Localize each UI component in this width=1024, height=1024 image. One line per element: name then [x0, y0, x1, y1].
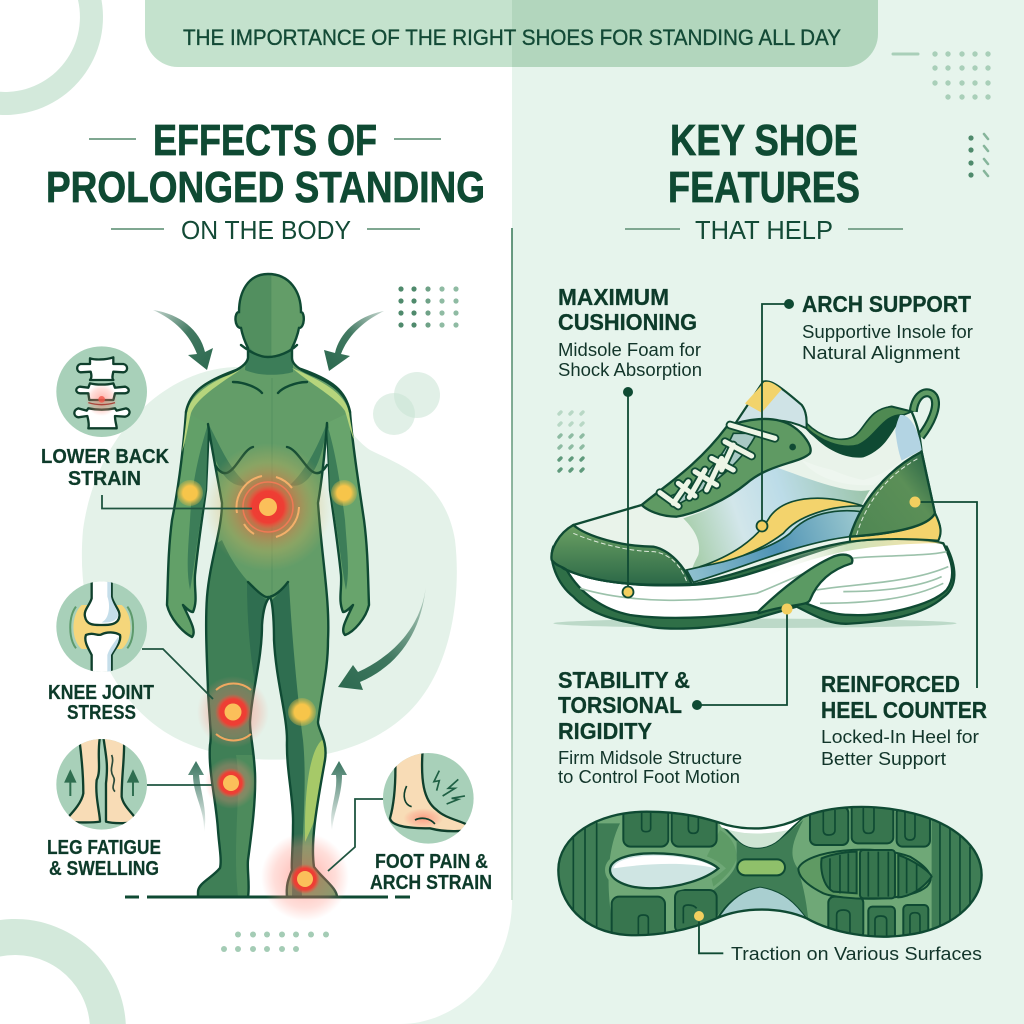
label: knee joint stress: STRESS: [67, 701, 136, 724]
label: foot pain and arch strain: [370, 850, 492, 894]
arrow: rising right: [331, 761, 347, 830]
heel yellow strip: [850, 513, 940, 542]
midsole top tint: [763, 539, 942, 578]
label: leg fatigue and swelling: [47, 836, 161, 880]
icon: knee joint: [56, 577, 147, 675]
blue stripe: [687, 511, 862, 582]
shoe connector lines: [622, 299, 977, 710]
upper base: [557, 381, 940, 585]
heading: key shoe features: KEY SHOE: [670, 116, 858, 165]
pain point: lower back: [204, 443, 332, 571]
eyestay panel: [642, 419, 811, 517]
heel counter: [850, 452, 935, 537]
label: maximum cushioning: CUSHIONING: [558, 309, 697, 335]
lug grooves: [638, 805, 920, 937]
centre pill: [737, 859, 785, 875]
label: lower back strain: STRAIN: [68, 467, 141, 490]
centre divider: [511, 228, 513, 900]
body shading: [190, 270, 327, 900]
label: reinforced heel counter: [821, 671, 987, 769]
left arm: [167, 367, 245, 637]
pain point: calf: [205, 757, 257, 809]
label: foot pain and arch strain: FOOT PAIN &: [375, 850, 488, 873]
heading: effects of prolonged standing: EFFECTS OF: [153, 116, 377, 165]
dots: below body: [221, 932, 329, 952]
joint points: [177, 480, 357, 726]
label: stability and torsional rigidity: TORSIONAL: [558, 692, 682, 718]
laces: [660, 425, 775, 506]
arch panels: [717, 817, 803, 849]
label: reinforced heel counter: REINFORCED: [821, 671, 960, 697]
midfoot tone: [713, 820, 808, 920]
title banner: THE IMPORTANCE OF THE RIGHT SHOES FOR STANDING ALL DAY: [183, 25, 841, 50]
label: maximum cushioning: [558, 284, 702, 380]
arrow: lower right: [338, 585, 426, 690]
label: reinforced heel counter: Locked-In Heel for: [821, 726, 979, 747]
ground line: [125, 896, 410, 898]
label: stability and torsional rigidity: Firm Midsole Structure: [558, 747, 742, 768]
heel oval: [610, 853, 718, 888]
label: foot pain and arch strain: ARCH STRAIN: [370, 871, 492, 894]
label: reinforced heel counter: Better Support: [821, 748, 946, 769]
label: lower back strain: LOWER BACK: [41, 445, 169, 468]
shoe illustration: [551, 381, 957, 629]
arm shading: [188, 424, 348, 590]
heading: key shoe features: THAT HELP: [695, 215, 833, 245]
title banner: [145, 0, 878, 67]
torso, head and legs: [186, 274, 350, 897]
ground shadow: [553, 619, 957, 628]
arrow: upper left: [153, 310, 213, 370]
icon: leg fatigue: [56, 737, 147, 830]
label: stability and torsional rigidity: [558, 667, 742, 787]
lace gap: [662, 433, 757, 503]
label: stability and torsional rigidity: RIGIDITY: [558, 718, 652, 744]
edge strips: [558, 823, 620, 937]
label: stability and torsional rigidity: to Control Foot Motion: [558, 766, 740, 787]
label: arch support: Supportive Insole for: [802, 321, 973, 342]
label: stability and torsional rigidity: STABILITY &: [558, 667, 690, 693]
label: maximum cushioning: Midsole Foam for: [558, 339, 701, 360]
midsole: [567, 539, 952, 618]
label: arch support: [802, 291, 973, 363]
connector lines: body: [102, 495, 383, 871]
dots: top right: [893, 51, 991, 178]
icon: foot pain: [383, 750, 474, 844]
label: maximum cushioning: Shock Absorption: [558, 359, 702, 380]
midsole lines: [580, 552, 948, 603]
heading: effects of prolonged standing: PROLONGED STANDING: [46, 163, 485, 212]
centre highlight line: [271, 275, 272, 596]
label: traction: Traction on Various Surfaces: [731, 943, 982, 964]
tread lugs: [612, 802, 930, 940]
right arm: [295, 367, 369, 635]
dots: beside head: [398, 286, 459, 328]
icon: lower back: [56, 346, 147, 437]
tongue: [733, 381, 807, 428]
label: lower back strain: [41, 445, 169, 490]
decorative rings: [0, 0, 126, 1024]
overlapping circles: [373, 372, 440, 435]
heading: key shoe features: FEATURES: [668, 163, 860, 212]
outline strokes: [186, 274, 350, 897]
outsole: [552, 547, 954, 629]
collar: [807, 409, 905, 458]
stability shank: [758, 555, 852, 613]
shoulder highlights: [182, 370, 240, 452]
arrow: upper right: [324, 311, 384, 371]
heading: effects of prolonged standing: ON THE BODY: [181, 215, 351, 245]
heading: key shoe features: [625, 116, 903, 245]
pain point: ankle: [261, 833, 349, 921]
human body figure: [167, 270, 369, 900]
heel tab: [913, 393, 936, 437]
label: reinforced heel counter: HEEL COUNTER: [821, 697, 987, 723]
label: maximum cushioning: MAXIMUM: [558, 284, 669, 310]
pain point: left knee: [197, 676, 269, 748]
outsole illustration: [558, 802, 983, 953]
yellow swoosh: arch support: [700, 498, 863, 567]
label: knee joint stress: [48, 681, 154, 724]
body background blob: [82, 367, 457, 760]
toe cap: [551, 525, 692, 585]
label: knee joint stress: KNEE JOINT: [48, 681, 154, 704]
arrow: rising left: [188, 761, 205, 832]
side panel: [683, 465, 870, 582]
label: arch support: ARCH SUPPORT: [802, 291, 972, 317]
label: arch support: Natural Alignment: [802, 342, 960, 363]
dots: left of shoe: [559, 412, 583, 471]
heading: effects of prolonged standing: [46, 116, 485, 245]
label: leg fatigue and swelling: LEG FATIGUE: [47, 836, 161, 859]
label: leg fatigue and swelling: & SWELLING: [49, 857, 159, 880]
